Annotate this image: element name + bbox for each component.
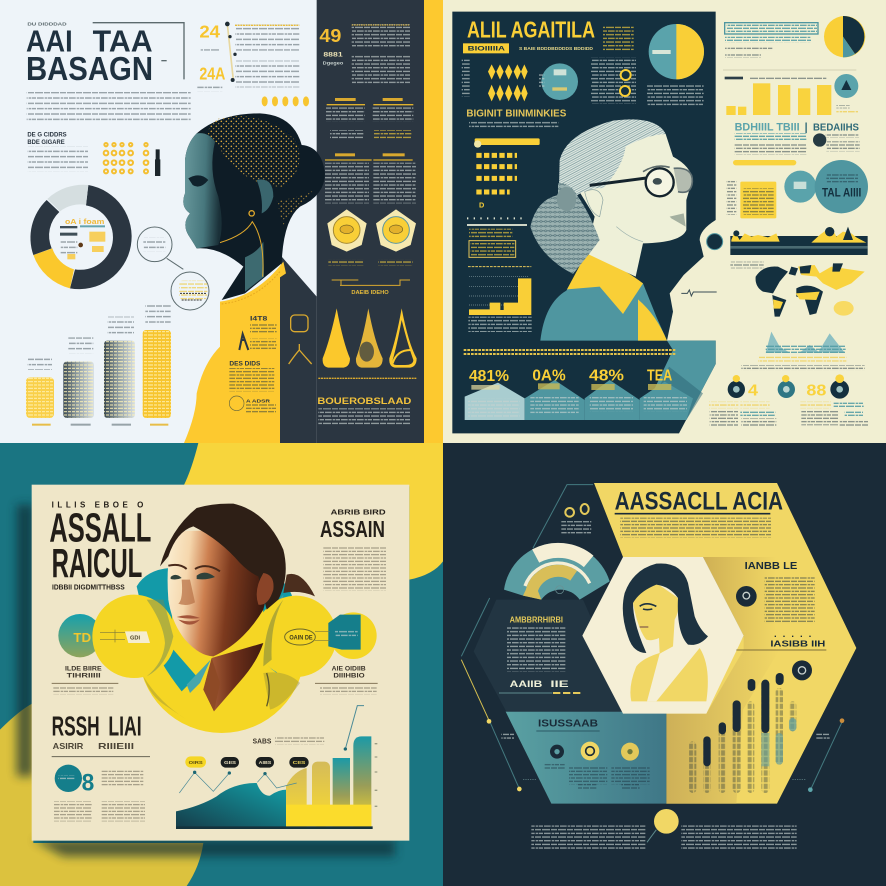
heading: lower title [52,711,150,757]
donut centre labels: oA i foam [65,217,105,226]
panel: teal lower left [506,712,666,804]
small navy badge [707,234,723,250]
skyline band [730,227,868,255]
text block: left note [27,133,88,172]
shaded upper panel [703,557,776,650]
heading: hexagon title: AASSACLL ACIA [615,489,783,516]
bar chart: yellow columns [723,70,858,115]
text block: dark panel: IIE [550,679,569,689]
footer: circle and text [531,809,797,849]
chart: area with yellow bars and markers: SABS [253,737,271,746]
text column: dark side panel: Dgegeo [323,60,344,65]
text blocks: teal headings [733,122,860,165]
portrait: photographic woman [160,504,315,711]
heading: section and bullet rows [466,109,567,209]
icons: circular labels and figures [709,374,868,427]
stat circle and text [54,765,145,821]
heading: section and bullet rows: D [479,200,484,209]
side captions: TIHRIIIII [67,674,101,680]
shaded lower panel [666,650,780,804]
text block: left note: BDE GIGARE [27,140,65,146]
stats: four figures above teal blocks: 0A% [532,368,566,385]
illustration: woman in profile [183,113,325,443]
heading: yellow title: BIOIIIIIA [468,46,506,53]
chart: area with yellow bars and markers: CIIS [293,760,306,766]
outline: hexagon frame lines [461,485,842,788]
icon rows: people [488,64,528,101]
pie chart: navy, teal, yellow [824,16,865,57]
stats: four figures above teal blocks: TEA [647,368,672,385]
text block: right column: IANBB LE [745,561,798,572]
side captions [52,666,378,694]
teal corner behind stats [640,341,716,420]
small text and block [467,218,527,257]
text block: right column: IASIBB IIH [770,639,826,648]
yellow table and teal circles: TAL AIIII [822,186,861,200]
text on shirt: notes [229,316,277,413]
text block: dark panel [499,614,581,693]
pie chart: teal and yellow [649,24,704,79]
dots on frame [487,718,844,792]
icon row: yellow drops [262,96,309,106]
text column: dark side panel: 8881 [323,52,343,59]
portrait circles: TD [73,630,91,645]
timeline: yellow figures and notes: 24 [199,21,220,41]
teal panel content: ISUSSAAB [538,718,598,729]
portrait circles: GDI [130,636,140,642]
heading: right title: ASSAIN [320,516,385,542]
teal panel content [536,718,650,789]
chart: area with yellow bars and markers: GIIS [224,760,237,766]
icon: dark bottle [155,149,160,176]
text on shirt: notes: DES DIDS [229,360,260,367]
text blocks: teal headings: BEDAIIHS [813,123,859,134]
heading: lower title: ASIRIR [53,741,84,751]
yellow table and teal circles [726,160,868,218]
chart: area with yellow bars and markers: AIBS [259,760,272,766]
card [32,485,409,841]
text block: dark panel: AAIIB [510,679,543,689]
side captions: AIE OIDIIB [332,666,366,672]
gauge chart [504,543,610,600]
text on shirt: notes: I4T8 [250,316,268,323]
icon grid: small yellow symbols [104,143,148,173]
heading: top-left title: TAA [93,26,153,59]
text block: right column [736,561,826,650]
text blocks: teal headings: BDHIIIL TBIII [735,122,800,134]
icon: pulse line [681,290,717,296]
side ticks [501,732,830,780]
text blocks: teal headings: | [805,122,808,134]
text column: dark side panel: 49 [319,25,341,46]
triangles: three teardrop charts [323,308,417,368]
text with yellow rings [591,57,704,106]
footer: yellow heading and text [317,378,417,425]
icons: circular labels and figures: 4 [748,383,758,400]
background shape: lower yellow [0,703,203,886]
text block: intro paragraph [27,92,191,123]
stats: four figures above teal blocks [465,368,693,420]
heading: top-left title: AAI [26,26,73,59]
heading: lower title: LIAI [108,711,142,742]
cream hexagon with portrait [582,557,744,714]
callout: circle with lines [137,227,172,262]
stats: four figures above teal blocks: 48% [589,368,624,385]
panel: dark text area [474,600,623,712]
heading: large title: ILLIS EBOE O [52,500,143,509]
timeline: yellow figures and notes: 24A [199,63,226,83]
illustration: woman with glasses [530,119,692,341]
bar chart: yellow steps [468,267,532,332]
heading: lower title: RSSH [52,711,100,742]
stat band: rule lines [464,350,676,354]
heading: right title [320,507,386,591]
stats: four figures above teal blocks: 481% [469,368,509,385]
icon: rounded frame and wishbone [289,315,312,364]
right heading and pie [725,16,865,58]
text block: dark panel: AMBBRRHIRBI [510,614,563,624]
heading: large title: RAICUL [52,540,142,586]
timeline: yellow figures and notes [197,21,299,92]
badges: two crest icons: DAEIB IDEHO [351,290,389,296]
stat circle and text: 8 [82,769,94,796]
heading: large title: ASSALL [49,505,151,551]
background shape: upper yellow [183,443,443,580]
heading: section and bullet rows: BIGINIT BIINMINKIES [466,109,567,120]
panel: top-left poster, profile on pale blue [0,0,443,443]
heading: top-left title: DU DIDDDAD [27,22,67,27]
bar chart: four striped columns [26,304,171,426]
heading: large title: IDBBII DIGDMITTHBSS [52,583,125,592]
hexagon: yellow panels [594,483,856,804]
heading: top-left title [26,22,153,88]
side captions: DIIIHBIO [333,674,365,680]
teal circle callout [539,63,578,100]
text block: left note: DE G CIDDRS [27,133,67,139]
panel: bottom-right poster, hexagon on navy [443,443,886,886]
bar chart: pill columns [689,660,812,793]
heading: lower title: RIIIEIII [98,741,134,751]
chart: area with yellow bars and markers [176,706,376,829]
card shadow [17,505,395,856]
panel: bottom-left poster, card on teal and yellow [0,443,443,886]
heading: top-left title: BASAGN [26,51,153,88]
icons: circular labels and figures: 88 [806,383,826,400]
text on shirt: notes: A ADSR [246,398,270,404]
side captions: ILDE BIIRE [65,666,102,672]
heading: large title [49,500,151,592]
icons and text: upper-left [561,504,591,534]
skyline in teal and footnote [741,332,865,371]
footer: yellow heading and text: BOUEROBSLAAD [317,396,412,406]
heading: right title: ABRIB BIRD [331,507,386,516]
world map [730,262,865,317]
heading: yellow title: S BAIE BDDDBDDDDS BDDIDD [519,46,594,51]
chart: area with yellow bars and markers: OIRS [189,760,203,766]
panel: top-right poster, woman with glasses [443,0,886,443]
heading: hexagon title [615,489,783,538]
donut chart [30,185,132,289]
badges: two crest icons [327,209,416,296]
heading: yellow title: ALIL AGAITILA [467,16,595,42]
text column: dark side panel [319,24,416,203]
callout: circle with yellow rows [171,272,209,310]
portrait circles [58,566,377,733]
portrait circles: OAIN DE [289,635,313,641]
heading: yellow title [463,16,634,53]
